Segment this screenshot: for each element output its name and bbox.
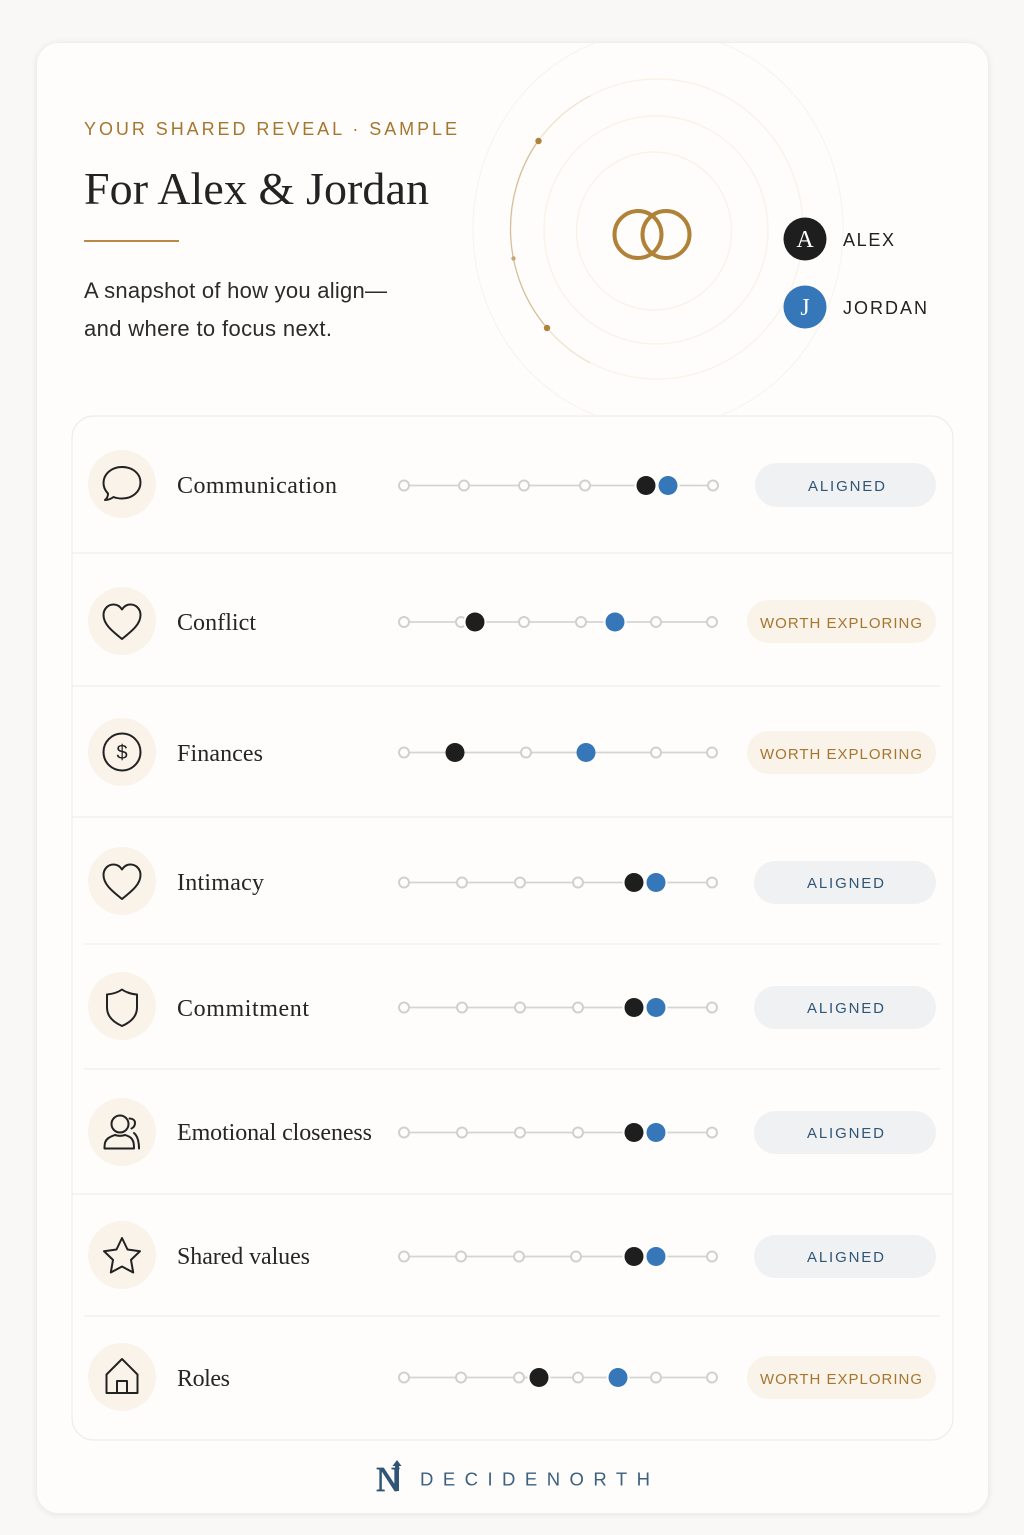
footer logo: DECIDENORTH xyxy=(420,1468,650,1490)
row: Conflict: Conflict xyxy=(177,610,256,636)
icon: dollar coin: $ xyxy=(116,742,128,764)
row: Intimacy: Intimacy xyxy=(177,870,264,896)
row: Finances: Finances xyxy=(177,741,263,767)
icon: interlocked rings xyxy=(614,211,690,258)
legend: Alex: ALEX xyxy=(843,230,894,250)
subtitle: A snapshot of how you align— xyxy=(84,278,387,303)
row: Shared values: Shared values xyxy=(177,1244,310,1270)
legend: Jordan xyxy=(784,286,927,328)
concentric orbit graphic xyxy=(473,31,843,427)
row: Shared values: ALIGNED xyxy=(807,1249,884,1266)
title: For Alex & Jordan xyxy=(84,163,429,214)
icon: heart xyxy=(104,604,140,639)
icon: star xyxy=(104,1238,140,1272)
row: Shared values xyxy=(88,1221,936,1289)
row: Roles xyxy=(88,1343,936,1411)
title rule xyxy=(84,240,179,242)
row: Commitment xyxy=(88,972,936,1040)
row: Intimacy xyxy=(88,847,936,915)
icon: dollar coin xyxy=(104,734,140,770)
legend: Alex xyxy=(784,218,894,260)
row: Conflict xyxy=(88,587,936,655)
icon: shield xyxy=(107,990,137,1026)
row: Finances: WORTH EXPLORING xyxy=(760,746,922,763)
footer logo xyxy=(376,1460,650,1499)
row: Roles: Roles xyxy=(177,1366,230,1392)
row: Finances xyxy=(88,718,936,786)
legend: Jordan: JORDAN xyxy=(843,298,927,318)
row: Emotional closeness: ALIGNED xyxy=(807,1125,884,1142)
eyebrow: YOUR SHARED REVEAL · SAMPLE xyxy=(84,119,457,139)
row: Communication: Communication xyxy=(177,473,337,499)
panel: scores table xyxy=(72,416,953,1440)
legend: Jordan: J xyxy=(800,295,810,321)
legend: Alex: A xyxy=(796,227,814,253)
row: Emotional closeness xyxy=(88,1098,936,1166)
icon: two people xyxy=(104,1116,139,1148)
subtitle: and where to focus next. xyxy=(84,316,332,341)
row: Commitment: ALIGNED xyxy=(807,1000,884,1017)
icon: house xyxy=(106,1359,138,1393)
row: Communication: ALIGNED xyxy=(808,478,885,495)
row: Commitment: Commitment xyxy=(177,996,309,1022)
icon: heart xyxy=(104,864,140,899)
footer logo: N xyxy=(376,1460,400,1499)
row: Intimacy: ALIGNED xyxy=(807,875,884,892)
row: Roles: WORTH EXPLORING xyxy=(760,1371,922,1388)
row: Communication xyxy=(88,450,936,518)
icon: speech bubble xyxy=(104,467,140,500)
row: Emotional closeness: Emotional closeness xyxy=(177,1120,372,1146)
row: Conflict: WORTH EXPLORING xyxy=(760,615,922,632)
